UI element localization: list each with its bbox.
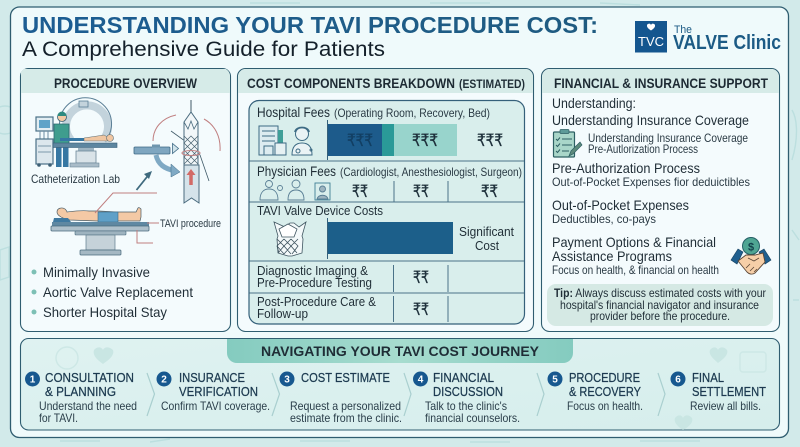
arrow: step 5 to 6 bbox=[658, 373, 665, 416]
cost table bbox=[249, 100, 524, 324]
label: TAVI procedure: TAVI procedure bbox=[160, 218, 221, 230]
arrow: step 3 to 4 bbox=[404, 373, 411, 416]
step 1: consultation and planning: Understand the need bbox=[39, 399, 137, 413]
step 4: financial discussion: financial counselors. bbox=[425, 411, 520, 425]
step 2: insurance verification: Confirm TAVI coverage. bbox=[161, 399, 270, 413]
step 5: procedure and recovery: Focus on health. bbox=[567, 399, 643, 413]
row: post-procedure care: Follow-up bbox=[257, 306, 308, 321]
icon: handshake and dollar coin bbox=[731, 238, 771, 274]
row: physician fees: ₹₹ bbox=[481, 182, 498, 202]
row: post-procedure care: Post-Procedure Care & bbox=[257, 294, 376, 309]
icon: nurse bbox=[292, 128, 312, 155]
step 3: cost estimate: estimate from the clinic. bbox=[290, 411, 402, 425]
heading: financial support: FINANCIAL & INSURANCE SUPPORT bbox=[554, 75, 768, 91]
step 1: consultation and planning bbox=[25, 370, 137, 425]
step 6: final settlement: SETTLEMENT bbox=[692, 384, 766, 399]
step 2: insurance verification: INSURANCE bbox=[179, 370, 245, 385]
heading: journey bbox=[227, 339, 573, 363]
step 4: financial discussion: 4 bbox=[418, 374, 424, 386]
step 5: procedure and recovery: 5 bbox=[552, 374, 558, 386]
row: post-procedure care bbox=[257, 294, 448, 322]
step 4: financial discussion: DISCUSSION bbox=[433, 384, 503, 399]
label: catheterization lab: Catheterization Lab bbox=[31, 172, 120, 186]
row: hospital fees bbox=[257, 104, 503, 160]
step 5: procedure and recovery: PROCEDURE bbox=[569, 370, 640, 385]
step 4: financial discussion bbox=[413, 370, 520, 425]
step 6: final settlement: FINAL bbox=[692, 370, 724, 385]
block: insurance coverage: Understanding: bbox=[552, 96, 636, 111]
row: diagnostic imaging: Diagnostic Imaging & bbox=[257, 263, 368, 278]
row: diagnostic imaging: Pre-Procedure Testing bbox=[257, 275, 372, 290]
row: diagnostic imaging bbox=[257, 263, 448, 292]
heading: cost components: (ESTIMATED) bbox=[459, 79, 525, 91]
block: payment options bbox=[552, 234, 719, 277]
list: benefits bbox=[32, 264, 193, 320]
step 2: insurance verification bbox=[156, 370, 270, 413]
title bbox=[22, 12, 598, 61]
step 1: consultation and planning: for TAVI. bbox=[39, 411, 78, 425]
panel: cost components breakdown bbox=[238, 68, 534, 332]
step 2: insurance verification: VERIFICATION bbox=[179, 384, 258, 399]
block: insurance coverage: Understanding Insurance Coverage bbox=[552, 112, 749, 128]
row: hospital fees: (Operating Room, Recovery, Bed) bbox=[334, 106, 490, 120]
row: physician fees: ₹₹ bbox=[352, 182, 368, 202]
row: TAVI valve device bbox=[257, 203, 514, 259]
callout lines bbox=[95, 193, 159, 243]
heading: journey: NAVIGATING YOUR TAVI COST JOURNEY bbox=[261, 343, 540, 359]
step 3: cost estimate: COST ESTIMATE bbox=[301, 370, 390, 385]
arrow: step 1 to 2 bbox=[147, 373, 154, 416]
icon: patient on table bbox=[51, 208, 149, 255]
step 2: insurance verification: 2 bbox=[161, 374, 167, 386]
row: hospital fees: ₹₹₹ bbox=[412, 131, 438, 151]
step 4: financial discussion: FINANCIAL bbox=[433, 370, 494, 385]
logo: The Valve Clinic: The bbox=[674, 24, 692, 36]
list: benefits: Shorter Hospital Stay bbox=[43, 304, 167, 320]
icon: valve bbox=[274, 222, 306, 256]
callout: tip: hospital's financial navigator and insurance bbox=[560, 298, 759, 312]
block: insurance coverage: Understanding Insurance Coverage bbox=[588, 131, 748, 145]
icon: catheterization lab bbox=[36, 98, 117, 167]
heading: procedure overview: PROCEDURE OVERVIEW bbox=[54, 75, 198, 91]
step 1: consultation and planning: 1 bbox=[30, 374, 36, 386]
block: out-of-pocket: Deductibles, co-pays bbox=[552, 212, 656, 226]
row: TAVI valve device: TAVI Valve Device Costs bbox=[257, 203, 383, 218]
logo: The Valve Clinic bbox=[635, 21, 781, 54]
icon: physicians bbox=[260, 180, 330, 200]
row: diagnostic imaging: ₹₹ bbox=[413, 268, 429, 288]
block: out-of-pocket: Out-of-Pocket Expenses bbox=[552, 197, 689, 213]
block: insurance coverage bbox=[552, 96, 749, 156]
row: physician fees: ₹₹ bbox=[413, 182, 429, 202]
arrow: step 2 to 3 bbox=[272, 373, 280, 416]
list: benefits: Aortic Valve Replacement bbox=[43, 284, 193, 300]
step 3: cost estimate bbox=[280, 370, 402, 425]
arrow: catheter direction bbox=[136, 171, 152, 190]
list: benefits: Minimally Invasive bbox=[43, 264, 150, 280]
step 1: consultation and planning: & PLANNING bbox=[45, 384, 116, 399]
step 4: financial discussion: Talk to the clinic's bbox=[425, 399, 507, 413]
block: out-of-pocket bbox=[552, 197, 689, 226]
row: hospital fees: ₹₹₹ bbox=[347, 131, 373, 151]
logo: The Valve Clinic: TVC bbox=[638, 34, 664, 49]
row: hospital fees: ₹₹₹ bbox=[477, 131, 503, 151]
block: payment options: Focus on health, & financial on health bbox=[552, 263, 719, 277]
step 1: consultation and planning: CONSULTATION bbox=[45, 370, 134, 385]
icon: hospital bbox=[259, 126, 286, 155]
title: A Comprehensive Guide for Patients bbox=[22, 38, 385, 61]
step 3: cost estimate: Request a personalized bbox=[290, 399, 401, 413]
block: payment options: Assistance Programs bbox=[552, 248, 672, 264]
step 5: procedure and recovery bbox=[548, 370, 643, 413]
row: physician fees bbox=[257, 163, 522, 202]
icon: handshake and dollar coin: $ bbox=[748, 242, 754, 254]
block: pre-authorization bbox=[552, 160, 750, 189]
row: physician fees: Physician Fees bbox=[257, 163, 336, 179]
block: pre-authorization: Pre-Authorization Process bbox=[552, 160, 700, 176]
panel: financial and insurance support bbox=[542, 68, 780, 332]
callout: tip bbox=[547, 284, 773, 326]
icon: TAVI valve on catheter bbox=[153, 100, 220, 203]
step 6: final settlement: Review all bills. bbox=[690, 399, 761, 413]
block: pre-authorization: Out-of-Pocket Expenses fior deduictibles bbox=[552, 175, 750, 189]
arrow: step 4 to 5 bbox=[537, 373, 544, 416]
step 5: procedure and recovery: & RECOVERY bbox=[569, 384, 641, 399]
row: TAVI valve device: Cost bbox=[475, 238, 499, 253]
icon: catheter device and curved arrow bbox=[134, 144, 180, 177]
step 6: final settlement bbox=[670, 370, 766, 413]
callout: tip: provider before the procedure. bbox=[590, 309, 730, 323]
heading: cost components: COST COMPONENTS BREAKDOWN bbox=[247, 75, 455, 91]
callout: tip: Tip: Always discuss estimated costs with your bbox=[554, 286, 766, 300]
title: UNDERSTANDING YOUR TAVI PROCEDURE COST: bbox=[22, 12, 598, 38]
logo: The Valve Clinic: VALVE Clinic bbox=[673, 32, 781, 54]
panel: navigating your TAVI cost journey bbox=[20, 338, 780, 430]
row: TAVI valve device: Significant bbox=[459, 224, 514, 239]
panel: procedure overview bbox=[20, 68, 230, 332]
block: payment options: Payment Options & Financial bbox=[552, 234, 716, 250]
row: hospital fees: Hospital Fees bbox=[257, 104, 330, 120]
row: post-procedure care: ₹₹ bbox=[413, 300, 429, 320]
row: physician fees: (Cardiologist, Anesthesiologist, Surgeon) bbox=[340, 165, 522, 179]
block: insurance coverage: Pre-Autlorization Process bbox=[588, 142, 698, 156]
icon: clipboard checklist bbox=[554, 130, 582, 157]
step 3: cost estimate: 3 bbox=[284, 374, 290, 386]
step 6: final settlement: 6 bbox=[675, 374, 681, 386]
